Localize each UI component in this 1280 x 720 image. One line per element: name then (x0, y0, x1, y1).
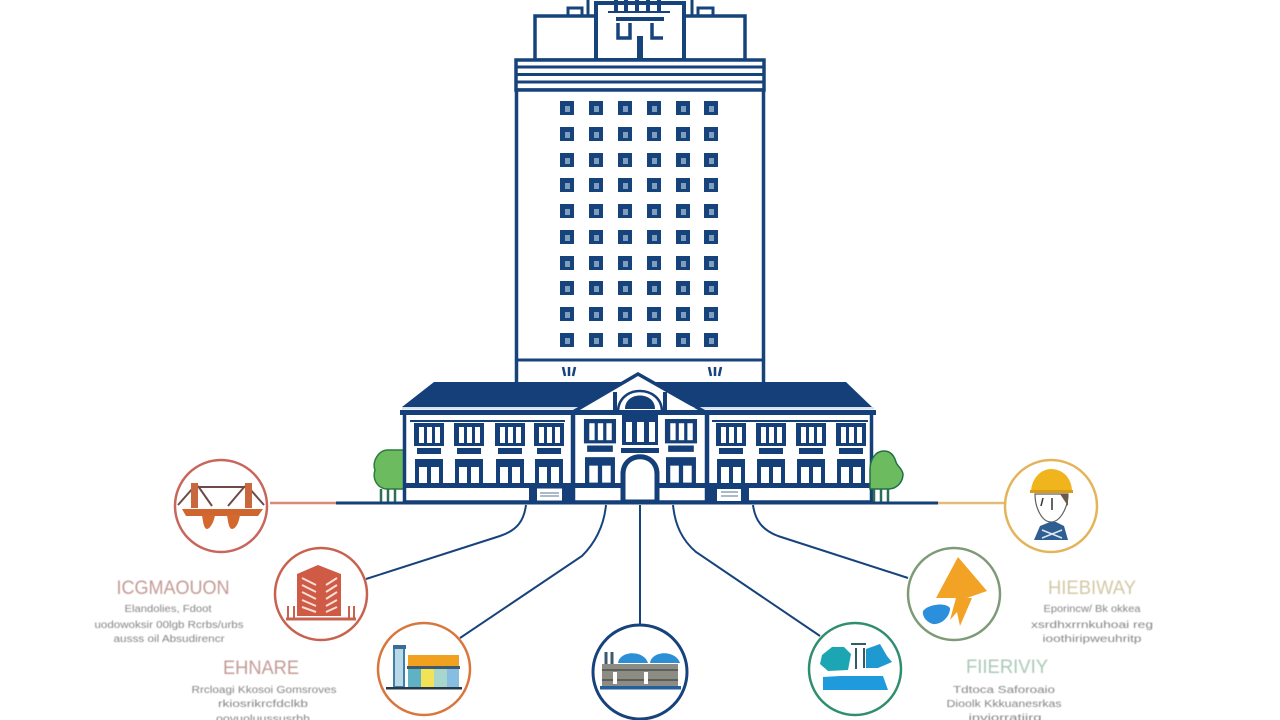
label: right lower: FIIERIVIY (966, 657, 1048, 678)
label: left lower: Rrcloagi Kkosoi Gomsroves (192, 685, 336, 696)
label: right lower: Tdtoca Saforoaio (953, 685, 1056, 696)
label: left lower (192, 658, 336, 720)
connectors (270, 503, 1005, 638)
icon: red building (275, 548, 367, 640)
label: right upper: Eporincw/ Bk okkea (1044, 604, 1141, 615)
icon: bridge (175, 460, 267, 552)
tower cornice stripes (516, 60, 764, 90)
label: right lower: Dioolk Kkkuanesrkas (946, 699, 1062, 710)
right tree (870, 451, 903, 502)
base band (405, 483, 871, 502)
icon: orange and blue shapes (908, 548, 1000, 640)
tower windows (560, 101, 718, 347)
left tree (374, 450, 404, 502)
icon: orange roof building (378, 623, 470, 715)
label: left upper: ICGMAOUON (116, 578, 230, 599)
label: right upper: xsrdhxrrnkuhoai reg (1031, 620, 1153, 631)
label: left upper: Elandolies, Fdoot (124, 604, 212, 615)
right wing windows (712, 421, 868, 484)
label: right upper: HIEBIWAY (1048, 578, 1136, 599)
icon: worker with hard hat (1005, 460, 1097, 552)
tower rooftop structures (535, 0, 745, 60)
label: left upper: uodowoksir 00lgb Rcrbs/urbs (94, 620, 244, 631)
label: left upper (94, 578, 244, 645)
label: right lower (946, 657, 1062, 720)
entrance door (623, 457, 657, 502)
tower (516, 0, 764, 384)
icon: domed factory (593, 625, 687, 719)
left wing windows (410, 421, 565, 484)
icon: blue water shapes (809, 623, 901, 715)
label: left upper: ausss oil Absudirencr (114, 634, 225, 645)
ground line (336, 502, 938, 504)
central pediment (572, 374, 706, 415)
roof (402, 382, 872, 407)
label: right upper: ioothiripweuhritp (1042, 634, 1142, 645)
facade piers (573, 412, 707, 502)
tower body (516, 90, 764, 384)
label: left lower: rkiosrikrcfdclkb (218, 699, 309, 710)
building walls (404, 412, 872, 502)
label: left lower: EHNARE (223, 658, 299, 679)
lower building (400, 374, 876, 502)
label: right upper (1031, 578, 1153, 645)
central windows (584, 414, 697, 484)
